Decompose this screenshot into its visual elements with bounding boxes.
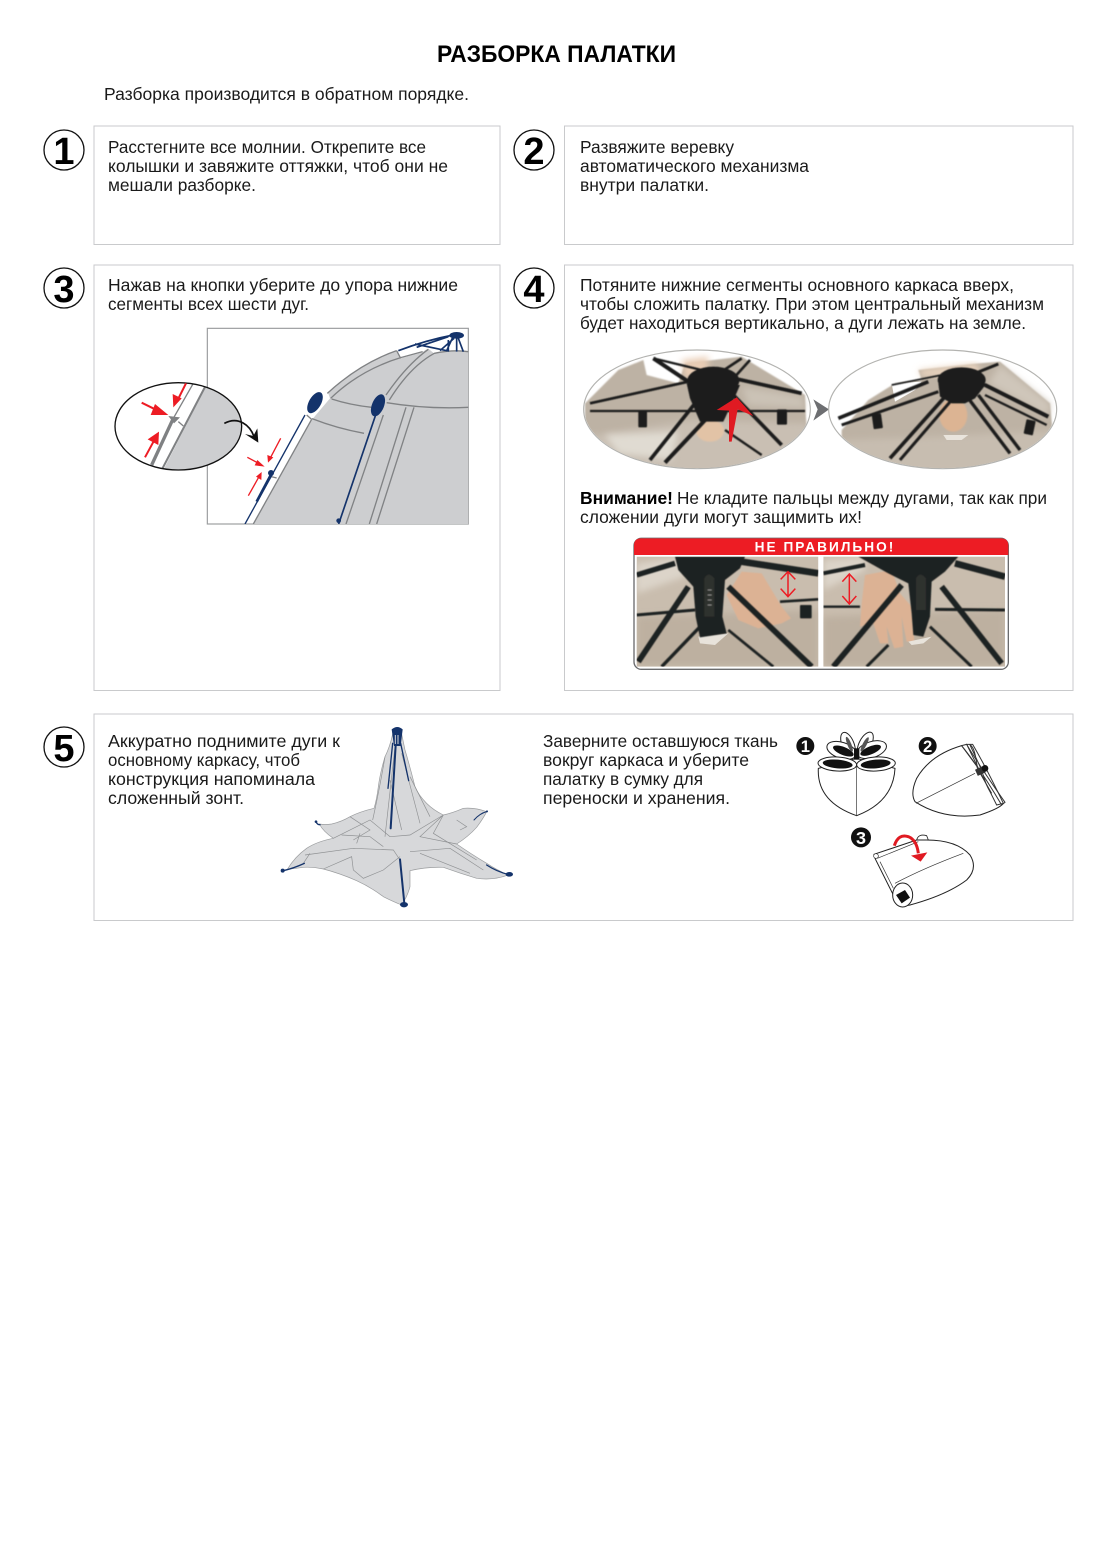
packing step 3 <box>851 827 973 907</box>
step 3 text: сегменты всех шести дуг. <box>108 294 309 314</box>
step 5 text left: конструкция напоминала <box>108 769 315 789</box>
step 4 text: Потяните нижние сегменты основного каркаса вверх, <box>580 275 1014 295</box>
red banner: НЕ ПРАВИЛЬНО! <box>755 539 893 554</box>
panel: step 3 <box>94 265 500 690</box>
illustration: tent dome with arc buttons <box>115 328 468 524</box>
step 5 text left: основному каркасу, чтоб <box>108 750 300 770</box>
curved black arrow <box>224 421 258 443</box>
red arrows <box>142 383 281 496</box>
step 1 text: мешали разборке. <box>108 175 256 195</box>
packing step 2 <box>913 737 1005 816</box>
step 4 number: 4 <box>523 269 545 311</box>
step 1 number <box>44 130 84 173</box>
step 5 text right <box>543 731 778 808</box>
step 5 text right: палатку в сумку для <box>543 769 703 789</box>
photos: folding the central mechanism <box>584 350 1057 473</box>
photo: after folding <box>829 350 1057 473</box>
panel: step 1 <box>94 126 500 244</box>
warning block: wrong hand position <box>634 538 1008 669</box>
intro text: Разборка производится в обратном порядке. <box>104 84 469 104</box>
step 1 <box>44 126 500 244</box>
step 5 number: 5 <box>53 728 75 770</box>
step 4 <box>514 265 1073 690</box>
step 3 text <box>108 275 458 314</box>
step 5 text left <box>108 731 340 808</box>
step 4 text: чтобы сложить палатку. При этом центральный механизм <box>580 294 1044 314</box>
illustration: packing sequence <box>796 730 1005 907</box>
step 4 text <box>580 275 1044 333</box>
red banner <box>634 538 1008 555</box>
photo: before folding <box>584 350 810 473</box>
step 2 <box>514 126 1073 244</box>
step 2 number <box>514 130 554 173</box>
step 1 text: Расстегните все молнии. Открепите все <box>108 137 426 157</box>
packing step 2: 2 <box>923 737 932 756</box>
photo: hand from the left <box>823 557 1005 667</box>
step 3 number <box>44 268 84 311</box>
step 3 <box>44 265 500 690</box>
step 1 text: колышки и завяжите оттяжки, чтоб они не <box>108 156 448 176</box>
step 5 text right: переноски и хранения. <box>543 788 730 808</box>
warning text: Не кладите пальцы между дугами, так как при <box>677 488 1047 508</box>
step 1 text <box>108 137 448 195</box>
title: РАЗБОРКА ПАЛАТКИ <box>437 41 676 68</box>
inset magnifier <box>115 383 247 470</box>
packing step 1 <box>796 730 896 816</box>
step 5 text right: Заверните оставшуюся ткань <box>543 731 778 751</box>
step 4 text: будет находиться вертикально, а дуги лежать на земле. <box>580 313 1026 333</box>
step 3 number: 3 <box>53 269 75 311</box>
packing step 1: 1 <box>801 737 810 756</box>
step 1 number: 1 <box>53 131 75 173</box>
panel: step 4 <box>564 265 1073 690</box>
step 4 number <box>514 268 554 311</box>
warning text: сложении дуги могут защимить их! <box>580 507 862 527</box>
illustration: folded tent like an umbrella <box>281 727 513 907</box>
panel: step 5 <box>94 714 1073 920</box>
packing step 3: 3 <box>856 828 866 848</box>
panel: step 2 <box>564 126 1073 244</box>
step 5 text right: вокруг каркаса и уберите <box>543 750 749 770</box>
red double arrow <box>842 574 856 604</box>
step 2 text <box>580 137 809 195</box>
arrow between photos <box>813 399 829 421</box>
step 3 text: Нажав на кнопки уберите до упора нижние <box>108 275 458 295</box>
red double arrow <box>781 572 795 597</box>
step 2 text: автоматического механизма <box>580 156 809 176</box>
step 2 text: внутри палатки. <box>580 175 709 195</box>
warning text: Внимание! <box>580 488 673 508</box>
red curved arrow <box>894 836 927 862</box>
step 5 text left: сложенный зонт. <box>108 788 244 808</box>
step 2 number: 2 <box>523 131 545 173</box>
warning text <box>580 488 1047 527</box>
step 5 number <box>44 727 84 770</box>
step 5 <box>44 714 1073 920</box>
step 2 text: Развяжите веревку <box>580 137 734 157</box>
red up arrow <box>717 397 753 442</box>
step 5 text left: Аккуратно поднимите дуги к <box>108 731 340 751</box>
photo: hand from the right <box>637 557 818 667</box>
